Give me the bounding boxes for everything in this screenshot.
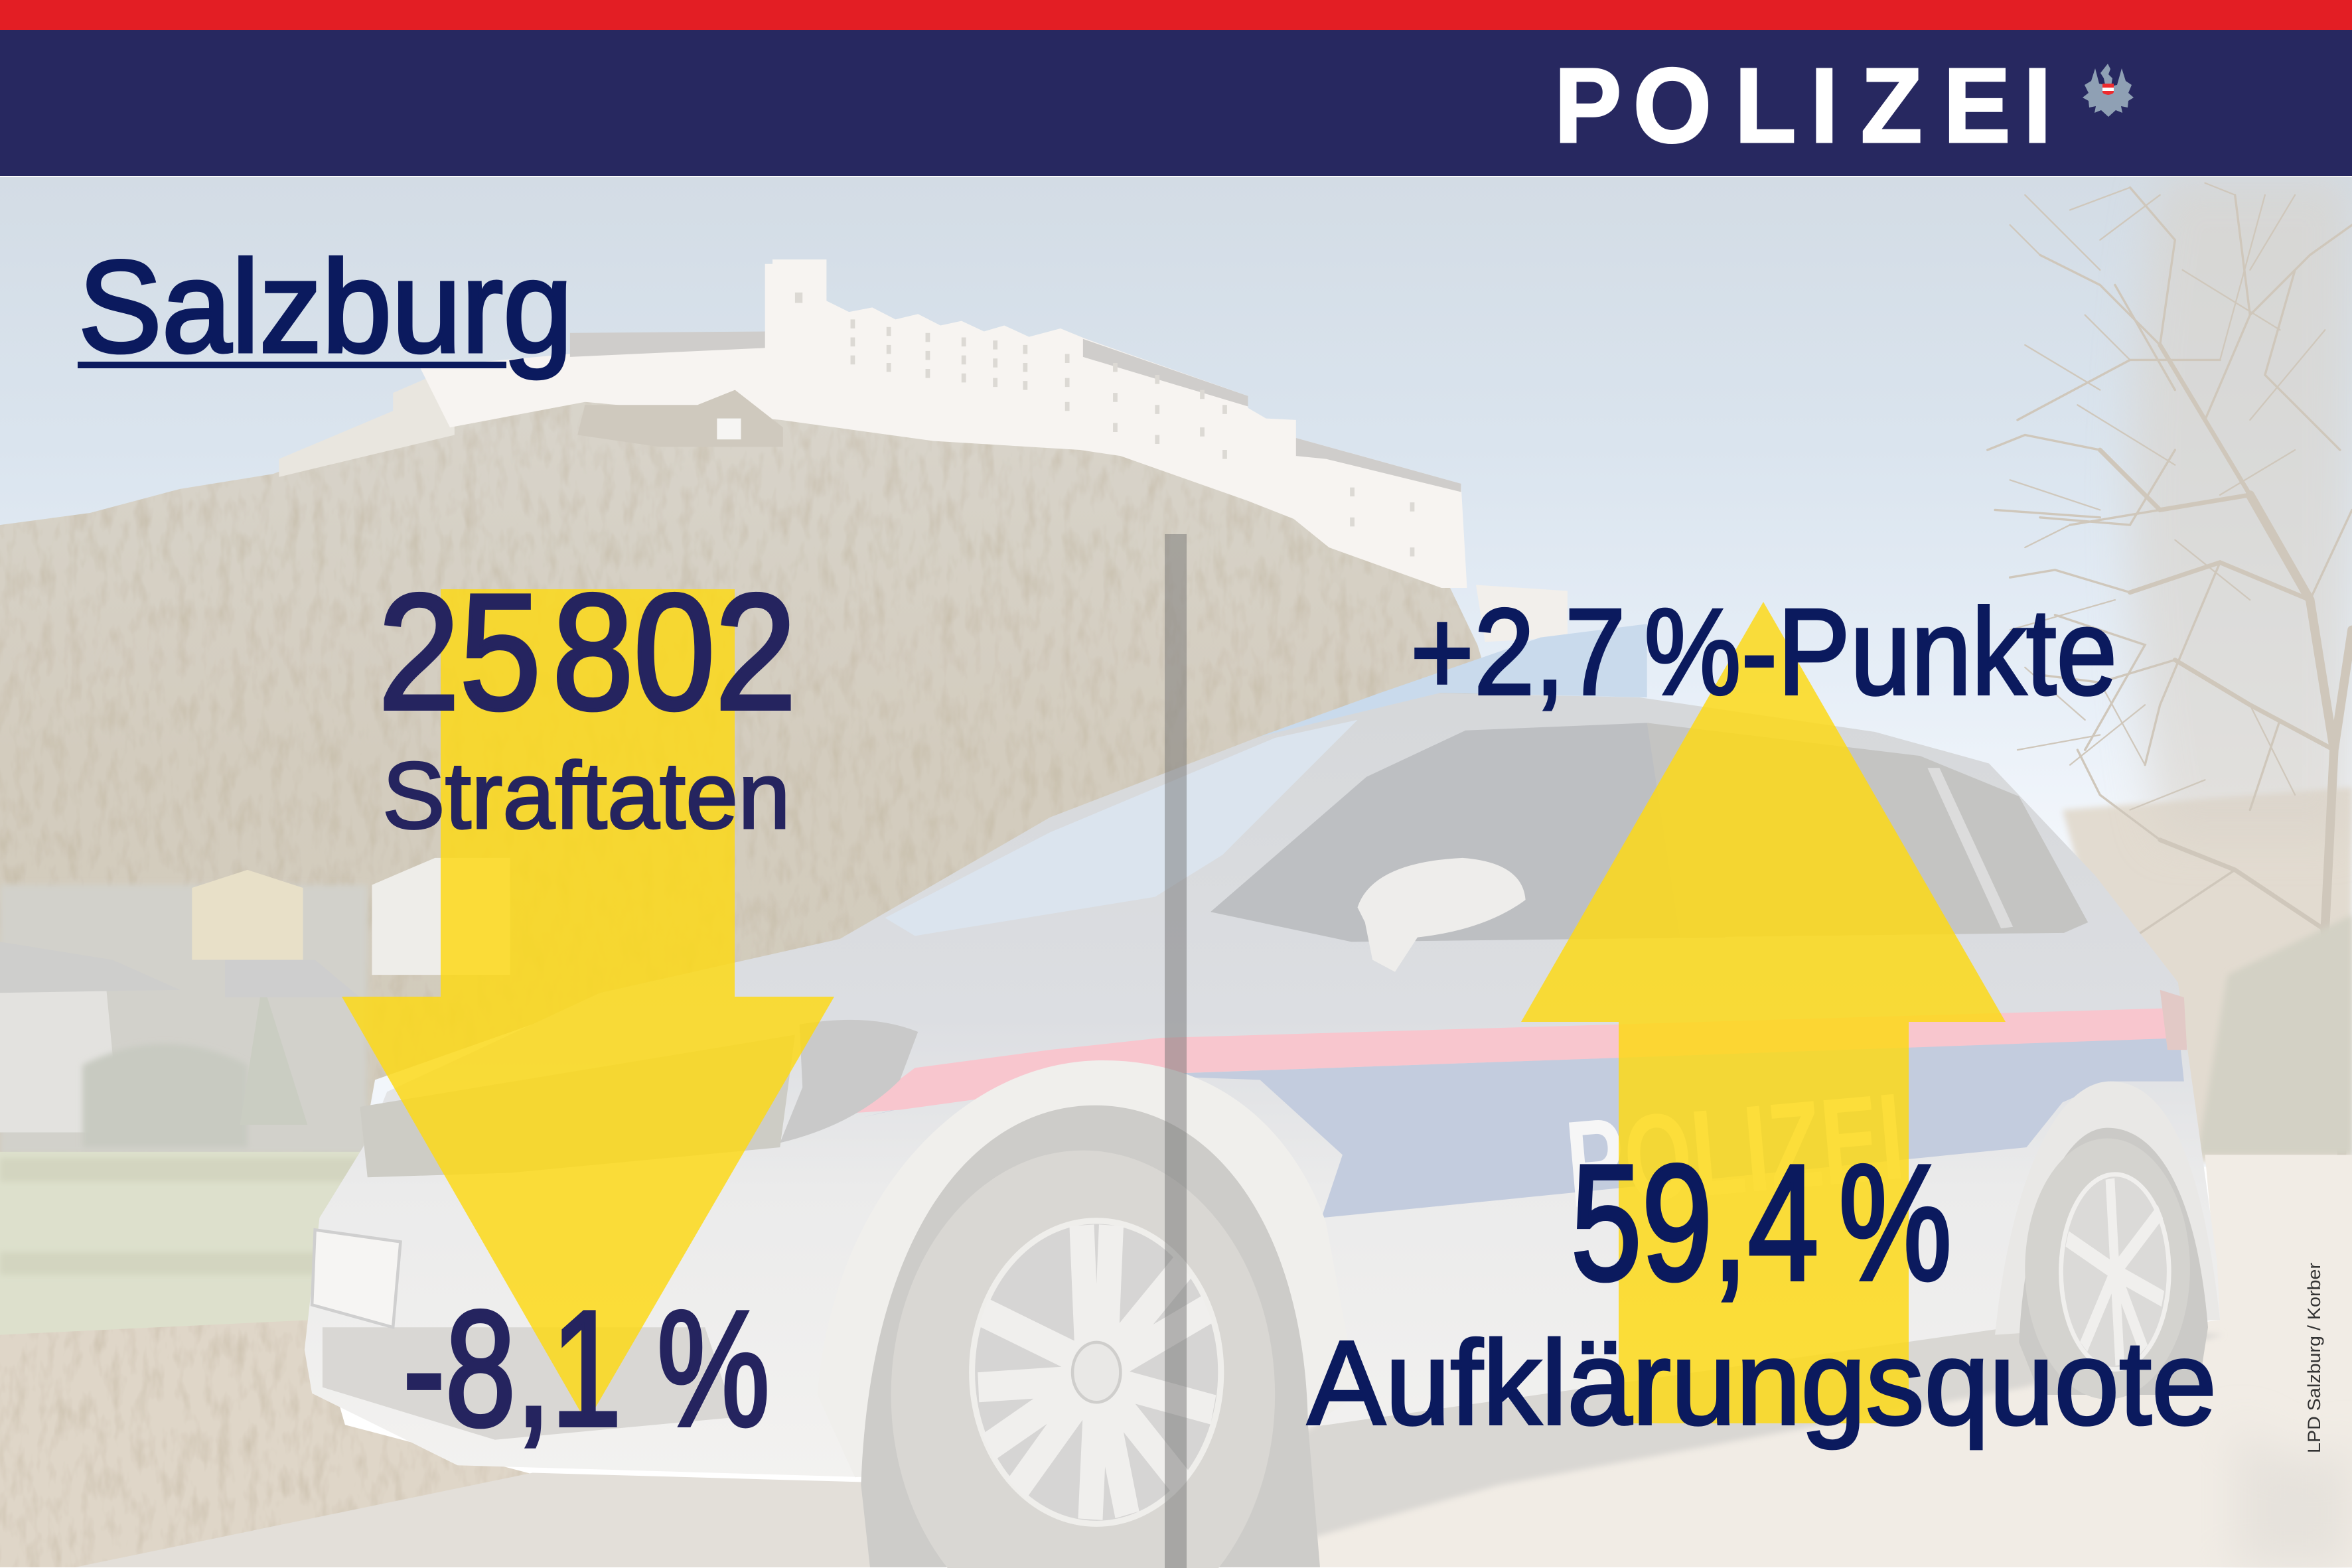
arrow: down bbox=[342, 589, 834, 1423]
rear tyre bbox=[2025, 1138, 2190, 1399]
right side distant hill bbox=[2063, 788, 2352, 1163]
label: Straftaten: Straftaten bbox=[382, 743, 790, 849]
front rim bbox=[972, 1221, 1221, 1524]
left wall bbox=[279, 378, 455, 477]
rear windows bbox=[1647, 723, 2088, 938]
divider line bbox=[1165, 534, 1187, 1568]
meadow shadows bbox=[0, 1158, 375, 1275]
lettering on door: POLIZEI bbox=[1561, 1068, 1909, 1234]
icon: Austrian eagle bbox=[2083, 64, 2134, 117]
small hut bbox=[577, 390, 783, 447]
navy header band bbox=[0, 30, 2352, 176]
door mirror bbox=[1357, 858, 1526, 972]
figure: +2,7 %-Punkte: +2,7 %-Punkte bbox=[1410, 584, 2117, 721]
far wall by the car roof bbox=[1476, 585, 1568, 642]
front wheel outer arch bbox=[818, 1060, 1357, 1477]
fortress windows bbox=[795, 293, 1414, 557]
road bbox=[1170, 1155, 2352, 1567]
blue side band bbox=[863, 1038, 2184, 1218]
side window bbox=[1211, 723, 1725, 942]
fortress bbox=[279, 259, 1568, 642]
front hub bbox=[1072, 1342, 1120, 1402]
POLIZEI wordmark: POLIZEI bbox=[1554, 46, 2051, 165]
red side stripe bbox=[855, 1008, 2185, 1113]
licence plate bbox=[312, 1230, 400, 1327]
hut window bbox=[717, 419, 741, 439]
right lower foliage bbox=[2197, 915, 2352, 1155]
fortress roofs bbox=[570, 332, 1461, 492]
rear rim bbox=[2061, 1175, 2169, 1370]
rear spokes bbox=[2067, 1179, 2163, 1365]
top red bar bbox=[0, 0, 2352, 30]
sky bbox=[0, 177, 2352, 1167]
right tree haze bbox=[2130, 177, 2352, 840]
wooded hill bbox=[0, 360, 1500, 1163]
police car bbox=[305, 624, 2220, 1568]
figure: 59,4 %: 59,4 % bbox=[1571, 1130, 1952, 1315]
roof light bar bbox=[1260, 624, 1647, 737]
lower bumper grille bbox=[323, 1327, 735, 1440]
label: Aufklärungsquote: Aufklärungsquote bbox=[1307, 1317, 2217, 1450]
front wheel well bbox=[861, 1105, 1320, 1567]
right tree branches bbox=[1988, 183, 2352, 1170]
foreground brush bbox=[0, 1320, 840, 1567]
rear light bbox=[2160, 990, 2187, 1050]
front grille bbox=[360, 1035, 795, 1177]
front spokes bbox=[978, 1226, 1213, 1520]
gravel left bbox=[75, 1473, 960, 1567]
road shadow under car bbox=[1200, 1320, 2223, 1567]
window pillar bbox=[1927, 768, 2013, 928]
lower right shade bbox=[2235, 1425, 2352, 1567]
headlight bbox=[780, 1020, 918, 1143]
meadow bbox=[0, 1152, 390, 1395]
figure: 25 802: 25 802 bbox=[378, 559, 796, 744]
car body bbox=[305, 693, 2220, 1477]
photo credit: LPD Salzburg / Korber bbox=[2304, 1263, 2324, 1453]
main building bbox=[420, 259, 1467, 588]
figure: -8,1 %: -8,1 % bbox=[403, 1276, 770, 1461]
windshield bbox=[885, 720, 1357, 936]
rear wheel outer arch bbox=[1995, 1082, 2220, 1335]
rear wheel well bbox=[2019, 1128, 2208, 1395]
village houses bbox=[0, 858, 510, 1155]
arrow: up bbox=[1521, 602, 2006, 1423]
heading: Salzburg: Salzburg bbox=[78, 234, 573, 380]
front tyre bbox=[891, 1151, 1275, 1568]
